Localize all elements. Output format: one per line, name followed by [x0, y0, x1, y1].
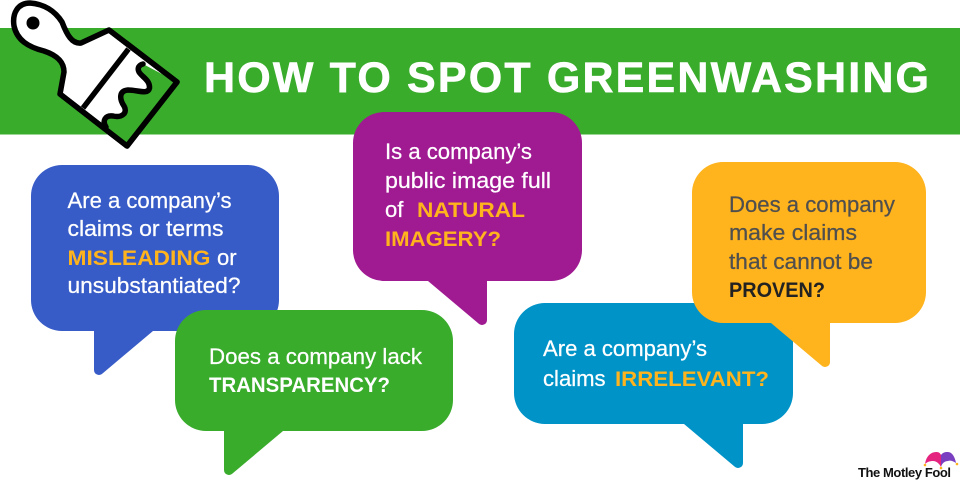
speech bubble: misleading [31, 165, 279, 375]
speech bubble: natural imagery: of [385, 197, 404, 222]
speech bubble: misleading: unsubstantiated? [68, 273, 240, 298]
speech bubble: misleading: claims or terms [68, 216, 224, 241]
speech bubble: transparency: Does a company lack [209, 344, 423, 369]
speech bubble: transparency [175, 310, 453, 475]
speech bubble: proven: that cannot be [729, 249, 873, 274]
speech bubble: misleading: MISLEADING [68, 246, 210, 270]
speech bubble: natural imagery: Is a company’s [385, 139, 532, 164]
icon: paint brush [14, 3, 177, 146]
title: HOW TO SPOT GREENWASHING [204, 54, 929, 102]
speech bubble: misleading: or [217, 245, 237, 270]
speech bubble: natural imagery [353, 112, 582, 325]
speech bubble: proven: PROVEN? [729, 278, 825, 302]
speech bubble: irrelevant [514, 303, 793, 468]
speech bubble: natural imagery: IMAGERY? [385, 227, 501, 251]
speech bubble: proven: make claims [729, 220, 857, 245]
speech bubble: misleading: Are a company’s [68, 188, 232, 213]
speech bubble: irrelevant: Are a company’s [543, 336, 707, 361]
speech bubble: proven [692, 162, 926, 367]
logo wordmark: The Motley Fool [858, 465, 951, 480]
speech bubble: irrelevant: claims [543, 366, 606, 391]
speech bubble: transparency: TRANSPARENCY? [209, 373, 390, 397]
icon: jester hat [924, 452, 958, 469]
speech bubble: natural imagery: NATURAL [417, 198, 525, 222]
speech bubble: irrelevant: IRRELEVANT? [615, 367, 769, 391]
speech bubble: proven: Does a company [729, 192, 895, 217]
title banner [0, 28, 960, 134]
logo: The Motley Fool [858, 452, 958, 480]
speech bubble: natural imagery: public image full [385, 168, 551, 193]
